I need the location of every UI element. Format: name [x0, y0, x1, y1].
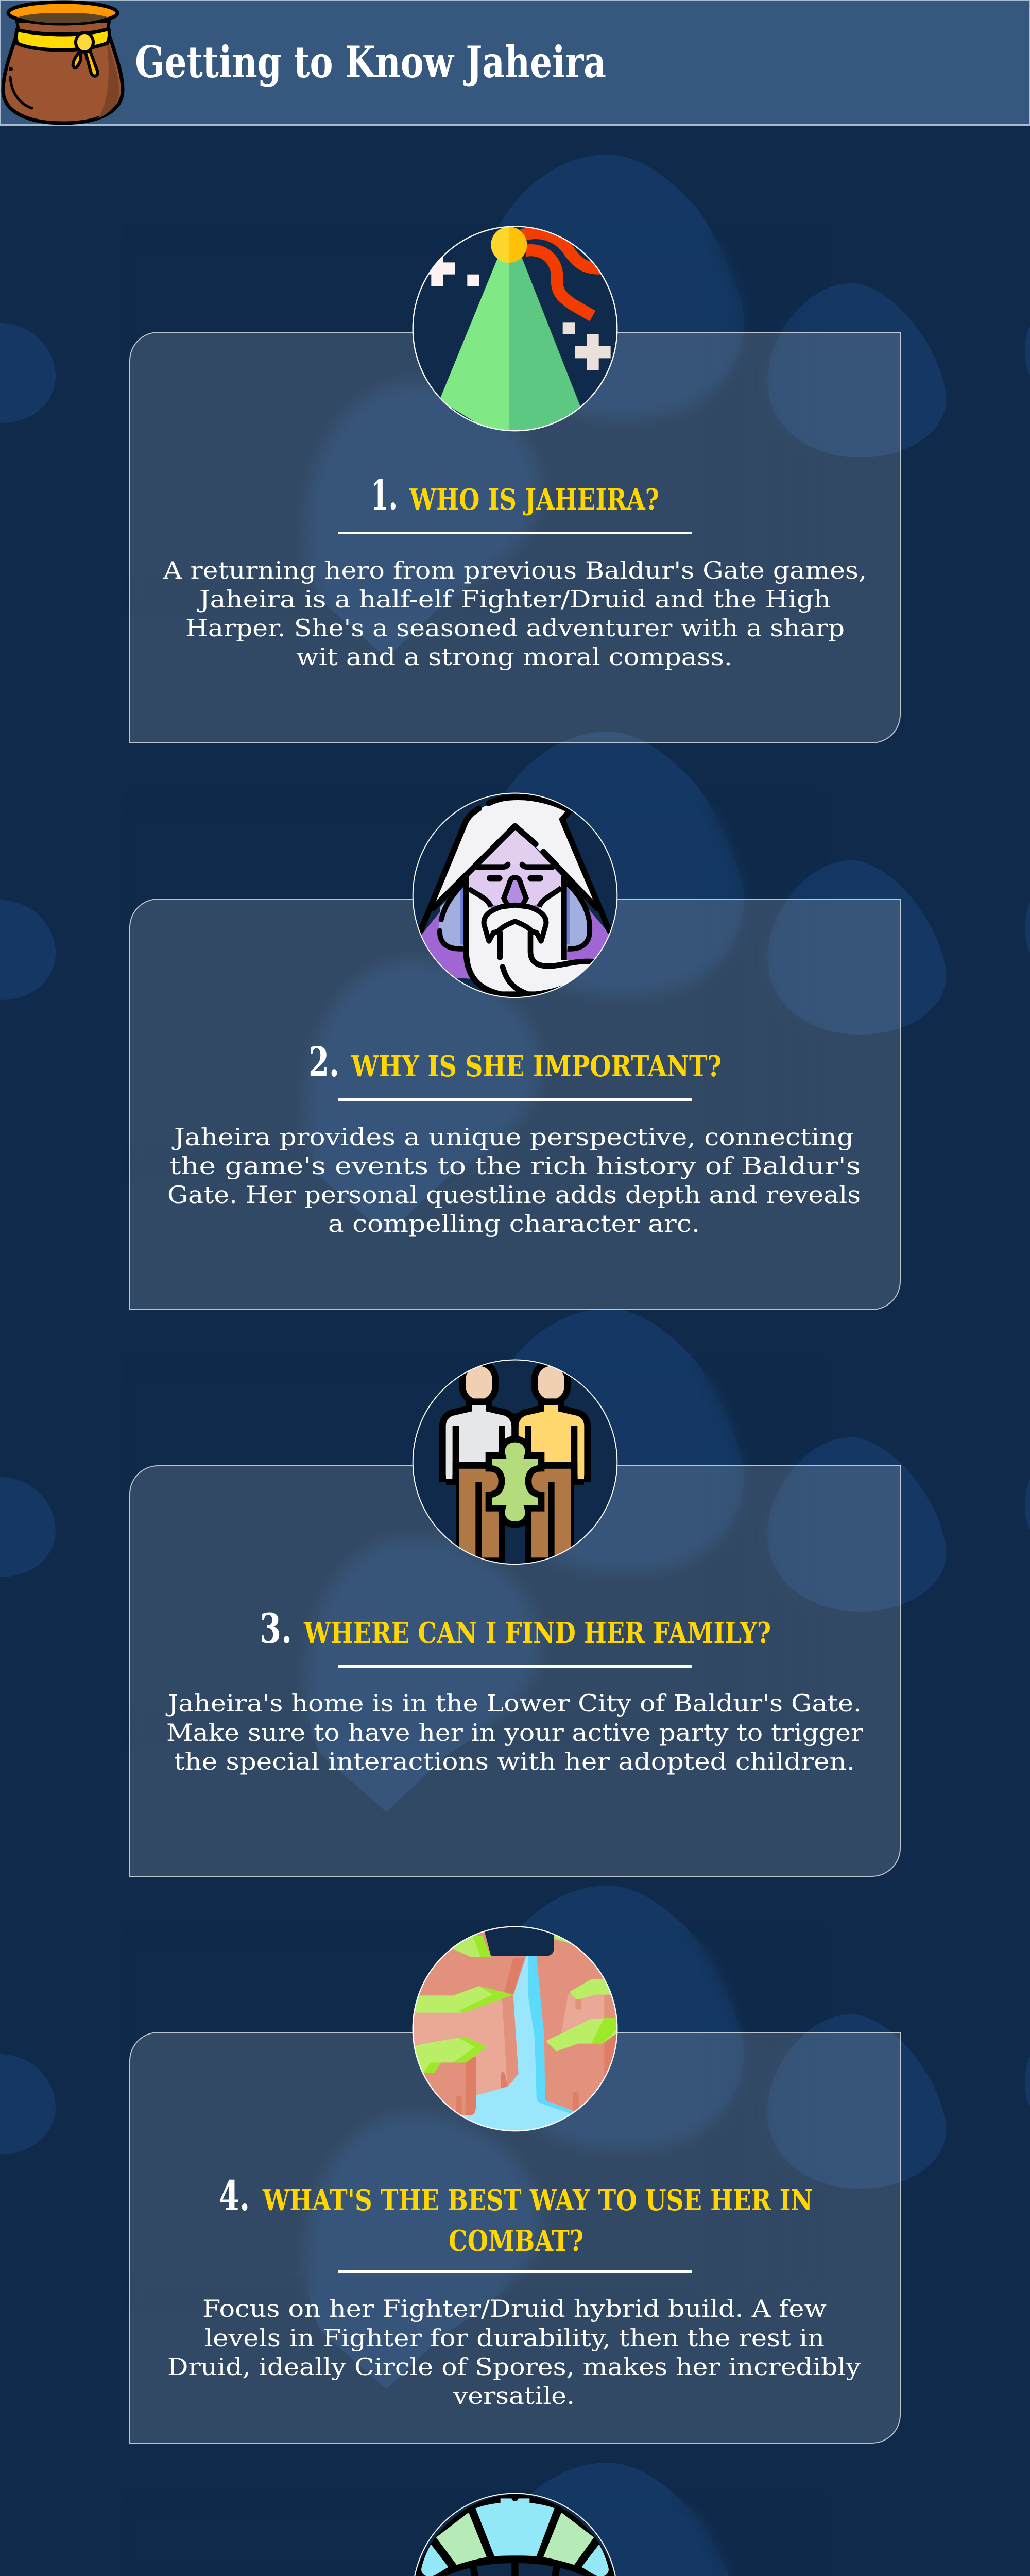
icon: party hat	[138, 226, 898, 731]
icon: paraglider	[414, 2493, 616, 2576]
card 1 text	[163, 471, 867, 671]
card 2 text: WHY IS SHE IMPORTANT?	[351, 1049, 722, 1083]
section 5: can I romance Jaheira	[414, 2493, 616, 2576]
card 4 text: versatile.	[453, 2382, 575, 2410]
card 4 text	[167, 2172, 861, 2410]
icon: hooded wizard	[138, 792, 898, 1297]
card 4 text: 4.	[219, 2172, 250, 2220]
card 2 text: the game's events to the rich history of Baldur's	[169, 1152, 861, 1180]
card 2 text: 2.	[308, 1038, 339, 1086]
card 2 text	[167, 1038, 861, 1238]
card 4 text: COMBAT?	[449, 2224, 583, 2258]
icon: canyon waterfall	[138, 1926, 898, 2431]
card 1 text: A returning hero from previous Baldur's Gate games,	[163, 556, 867, 584]
card panel 1	[129, 332, 901, 743]
card 3 text: 3.	[260, 1604, 292, 1653]
card 3 text: WHERE CAN I FIND HER FAMILY?	[303, 1616, 771, 1650]
card 4 text: Druid, ideally Circle of Spores, makes her incredibly	[167, 2353, 861, 2381]
icon: pouch	[1, 0, 125, 125]
section 4: best way to use her in combat	[129, 1926, 901, 2444]
card panel 4	[129, 2032, 901, 2444]
card 3 text	[166, 1604, 863, 1775]
section 3: where can I find her family	[129, 1359, 901, 1877]
card panel 3	[129, 1465, 901, 1877]
card 1 text: Harper. She's a seasoned adventurer with a sharp	[185, 614, 845, 642]
card 2 text: Jaheira provides a unique perspective, connecting	[171, 1123, 854, 1151]
card 4 text: WHAT'S THE BEST WAY TO USE HER IN	[262, 2183, 813, 2217]
card 3 text: Jaheira's home is in the Lower City of Baldur's Gate.	[166, 1689, 862, 1717]
card 1 text: Jaheira is a half-elf Fighter/Druid and the High	[197, 585, 831, 613]
icon: family with puzzle piece	[138, 1359, 898, 1864]
card 5 text	[0, 2473, 1030, 2576]
card 2 text: Gate. Her personal questline adds depth and reveals	[167, 1181, 861, 1209]
card 1 text: WHO IS JAHEIRA?	[409, 483, 659, 517]
card 1 text: 1.	[371, 471, 398, 519]
card 1 text: wit and a strong moral compass.	[296, 643, 732, 671]
card 3 text: Make sure to have her in your active party to trigger	[166, 1719, 863, 1747]
card 4 text: Focus on her Fighter/Druid hybrid build. A few	[202, 2295, 827, 2323]
card 3 text: the special interactions with her adopted children.	[174, 1748, 855, 1775]
card 4 text: levels in Fighter for durability, then the rest in	[204, 2324, 825, 2352]
card 2 text: a compelling character arc.	[328, 1210, 700, 1238]
section 2: why is she important	[129, 792, 901, 1310]
header band	[0, 0, 1030, 126]
section 1: who is Jaheira	[129, 226, 901, 743]
card panel 2	[129, 899, 901, 1310]
